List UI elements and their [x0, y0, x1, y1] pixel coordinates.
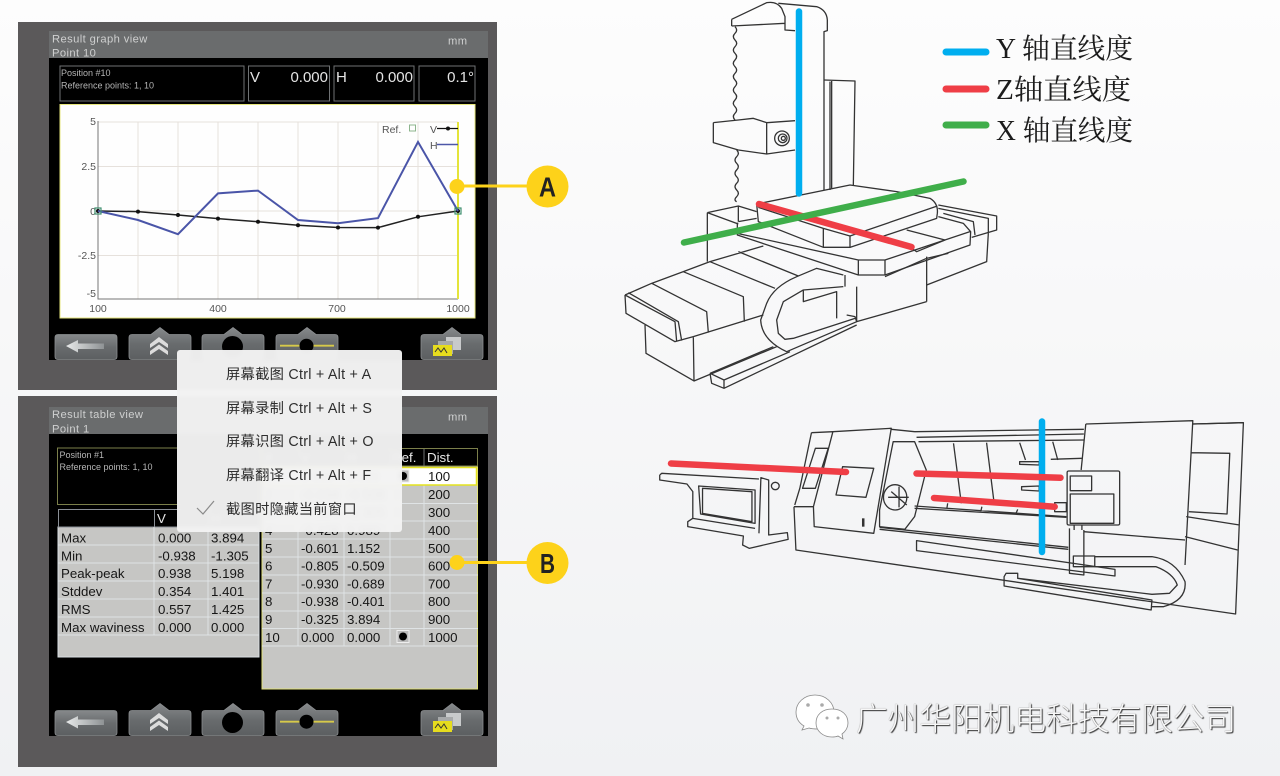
statistics table: 0.557 [158, 602, 191, 617]
title bar [49, 407, 488, 436]
line chart [60, 104, 475, 318]
data table: -0.938 [301, 594, 339, 609]
data table: 1 [265, 469, 272, 484]
data table: -0.224 [301, 505, 339, 520]
data table: 7 [265, 576, 272, 592]
panel: result table view [18, 396, 497, 767]
data table: 3 [265, 505, 272, 520]
line chart: 5 [90, 116, 96, 128]
data table: 100 [428, 469, 450, 484]
readout boxes: 0.000 [375, 69, 413, 86]
data table: -0.930 [301, 576, 339, 592]
machine drawing: CNC lathe [660, 421, 1243, 614]
data table: -1.305 [347, 505, 385, 520]
icon: WeChat bubbles [796, 695, 848, 739]
icon: check mark [196, 500, 214, 515]
data table: 1000 [428, 630, 458, 645]
data table: 10 [265, 630, 280, 645]
data table: 0.000 [347, 630, 380, 645]
axis legend [946, 33, 1133, 147]
chart legend: Ref. [382, 124, 401, 136]
data table [262, 448, 478, 689]
menu item: recognize: 屏幕识图 Ctrl + Alt + O [226, 434, 374, 450]
line chart: 100 [89, 303, 107, 315]
data table: 6 [265, 558, 272, 574]
data table: -0.508 [347, 487, 385, 502]
context menu popup [177, 350, 402, 532]
line chart: -5 [87, 288, 96, 300]
line chart: -2.5 [78, 250, 96, 262]
data table: 0.000 [347, 469, 380, 484]
statistics table: Max [61, 530, 86, 546]
readout boxes: 0.000 [290, 69, 328, 86]
line chart: 2.5 [81, 161, 96, 173]
statistics table: 0.000 [158, 530, 191, 546]
statistics table: Max waviness [61, 620, 145, 635]
machine drawing: horizontal boring mill [625, 2, 997, 388]
watermark text: 广州华阳机电科技有限公司 [856, 701, 1236, 737]
statistics table: Stddev [61, 584, 103, 599]
series V [96, 209, 460, 230]
data table: -0.401 [347, 594, 385, 609]
statistics table: 0.938 [158, 566, 191, 581]
title bar: Point 1 [52, 424, 90, 436]
data table: -0.325 [301, 612, 339, 627]
statistics table: Peak-peak [61, 566, 125, 581]
data table: 700 [428, 576, 450, 592]
position box [58, 448, 258, 504]
data table: 1.152 [347, 541, 380, 556]
readout boxes: Reference points: 1, 10 [61, 80, 154, 90]
statistics table: 3.894 [211, 530, 244, 546]
line chart: 700 [328, 303, 346, 315]
series H [98, 142, 458, 234]
chart legend [382, 124, 458, 152]
data table: 900 [428, 612, 450, 627]
data table: Ref. [392, 450, 416, 465]
title bar: mm [448, 412, 467, 424]
reference markers [95, 208, 461, 214]
statistics table: 0.000 [211, 620, 244, 635]
statistics table: 0.000 [158, 620, 191, 635]
statistics table: 1.425 [211, 602, 244, 617]
data table: 4 [265, 523, 272, 538]
title bar: Result graph view [52, 34, 148, 46]
data table: 8 [265, 594, 272, 609]
statistics table: 5.198 [211, 566, 244, 581]
data table: -0.428 [301, 523, 339, 538]
data table: 9 [265, 612, 272, 627]
menu item: translate: 屏幕翻译 Ctrl + Alt + F [226, 468, 371, 484]
data table: 200 [428, 487, 450, 502]
statistics table: -0.938 [158, 548, 196, 564]
position box: Reference points: 1, 10 [60, 462, 153, 472]
callout A [450, 166, 568, 208]
legend: Z axis: Z轴直线度 [996, 74, 1131, 106]
statistics table: -1.305 [211, 548, 249, 564]
title bar [49, 31, 488, 60]
statistics table [58, 510, 259, 657]
toolbar buttons [55, 704, 483, 736]
title bar: Result table view [52, 409, 144, 421]
axis line: X on mill [684, 182, 964, 242]
screen: result table [49, 407, 488, 736]
data table: 5 [265, 541, 272, 556]
data table: -0.509 [347, 558, 385, 574]
data table: 2 [265, 487, 272, 502]
callout A: A [539, 172, 556, 202]
line chart: 1000 [446, 303, 470, 315]
position box: Position #1 [60, 450, 104, 460]
statistics table: 0.354 [158, 584, 191, 599]
data table: 800 [428, 594, 450, 609]
line chart: 0 [90, 206, 96, 218]
axis line: Z on mill [759, 204, 912, 247]
axis line: Z lower on lathe [934, 498, 1055, 507]
panel: result graph view [18, 22, 497, 390]
data table: 400 [428, 523, 450, 538]
data table: -0.601 [301, 541, 339, 556]
legend: Y axis: Y 轴直线度 [996, 33, 1133, 65]
statistics table: RMS [61, 602, 91, 617]
menu item: hide window: 截图时隐藏当前窗口 [226, 502, 357, 518]
statistics table: 1.401 [211, 584, 244, 599]
data table: 300 [428, 505, 450, 520]
data table: -0.034 [301, 487, 339, 502]
axis line: Z middle on lathe [916, 474, 1060, 478]
data table: 0.000 [301, 630, 334, 645]
data table: H [347, 450, 357, 465]
data table: -0.805 [301, 558, 339, 574]
statistics table: H [211, 511, 221, 526]
line chart: 400 [209, 303, 227, 315]
data table: V [301, 450, 310, 465]
readout boxes [60, 66, 475, 101]
readout boxes: V [250, 69, 260, 86]
legend: X axis: X 轴直线度 [996, 115, 1133, 147]
title bar: mm [448, 36, 467, 48]
data table: -0.689 [347, 576, 385, 592]
menu item: screenshot: 屏幕截图 Ctrl + Alt + A [226, 366, 371, 382]
readout boxes: Position #10 [61, 68, 111, 78]
chart legend: H [430, 140, 438, 152]
statistics table: V [157, 511, 166, 526]
statistics table: Min [61, 548, 82, 564]
callout B: B [540, 548, 555, 579]
readout boxes: H [336, 69, 347, 86]
axis line: Z upper-left on lathe [671, 464, 846, 472]
title bar: Point 10 [52, 48, 96, 60]
toolbar buttons [55, 328, 483, 360]
data table: 0.989 [347, 523, 380, 538]
axis line: Y on mill [796, 12, 802, 194]
data table: 0.000 [301, 469, 334, 484]
data table: # [265, 450, 273, 465]
readout boxes: 0.1° [447, 69, 474, 86]
data table: 600 [428, 558, 450, 574]
data table: 3.894 [347, 612, 380, 627]
menu item: record: 屏幕录制 Ctrl + Alt + S [226, 400, 372, 416]
data table: 500 [428, 541, 450, 556]
axis line: Y on lathe [1039, 422, 1045, 552]
screen: result graph [49, 31, 488, 360]
data table: Dist. [427, 450, 454, 465]
chart legend: V [430, 124, 437, 136]
callout B [450, 542, 568, 584]
